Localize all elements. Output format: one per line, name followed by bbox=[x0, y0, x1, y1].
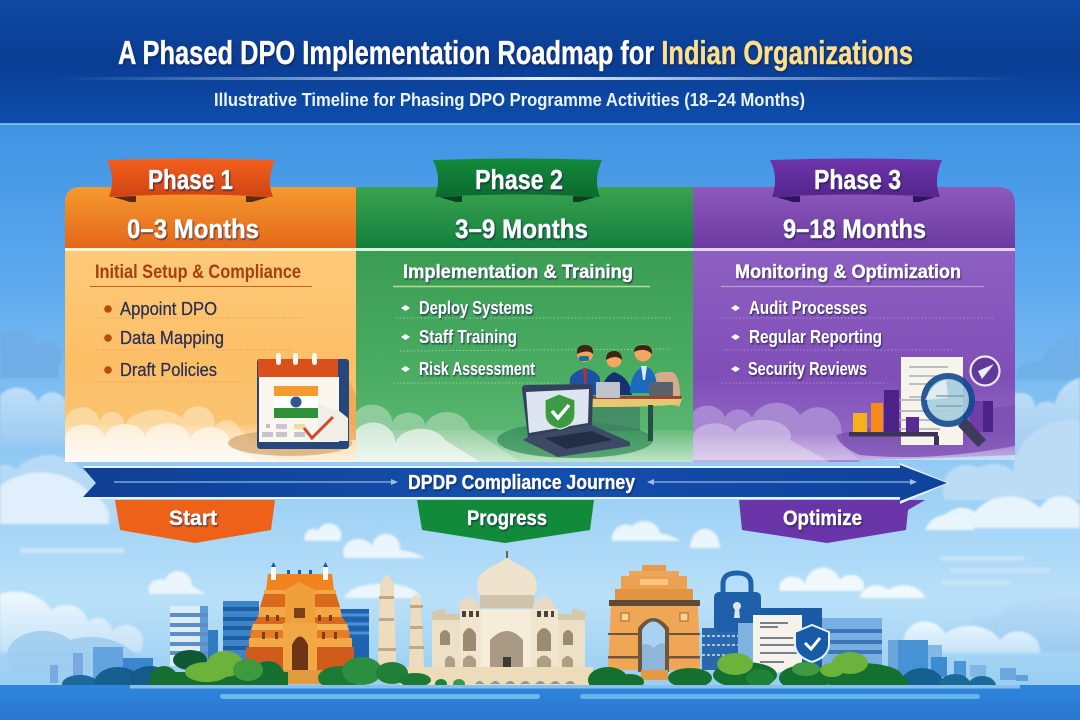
panel: phase 1 bbox=[65, 187, 356, 462]
tag: start: Start bbox=[169, 507, 217, 530]
clouds at base of phase 3 bbox=[693, 403, 1015, 462]
phase 3 duration: 9–18 Months bbox=[783, 214, 926, 244]
phase 1 tasks: Draft Policies bbox=[120, 360, 217, 380]
phase 2 label: Phase 2 bbox=[475, 164, 563, 195]
phase 1 duration: 0–3 Months bbox=[127, 214, 259, 244]
phase 2 tasks: Deploy Systems bbox=[419, 298, 533, 318]
ribbon: phase 2 bbox=[433, 158, 602, 202]
phase 3 tasks: Security Reviews bbox=[748, 359, 867, 379]
laptop bbox=[522, 384, 593, 437]
main building bbox=[432, 620, 585, 667]
skyline: distant city right bbox=[888, 640, 1028, 702]
icon: padlock, document and shield with buildings bbox=[702, 573, 882, 674]
trees right of document bbox=[779, 652, 908, 691]
background clouds right bbox=[779, 334, 1080, 653]
phase 3 tasks: Audit Processes bbox=[749, 298, 867, 318]
arrow label: DPDP Compliance Journey bbox=[408, 472, 636, 494]
small clouds between tags bbox=[149, 514, 975, 598]
phase 3 tasks: Regular Reporting bbox=[749, 327, 882, 347]
icon: calendar with Indian flag bbox=[228, 353, 356, 456]
trees left of temple bbox=[150, 650, 288, 695]
icon: team at desk with secure laptop bbox=[497, 344, 683, 458]
icon: report, bar chart and magnifier bbox=[849, 356, 1000, 447]
water bbox=[0, 685, 1080, 720]
landmark: India Gate bbox=[608, 565, 700, 680]
tag: progress: Progress bbox=[467, 507, 547, 530]
people bbox=[569, 344, 657, 395]
clouds at base of phase 2 bbox=[356, 405, 693, 462]
heading: implementation: Implementation & Training bbox=[403, 261, 633, 283]
clouds at base of phase 1 bbox=[65, 406, 356, 462]
tag: optimize: Optimize bbox=[783, 507, 862, 530]
panel: phase 3 bbox=[693, 187, 1015, 462]
tag: optimize bbox=[739, 500, 925, 543]
phase 2 tasks bbox=[393, 298, 670, 383]
shield bbox=[545, 394, 575, 429]
phase 1 tasks: Appoint DPO bbox=[120, 299, 217, 319]
trees right of temple bbox=[318, 657, 465, 690]
title: A Phased DPO Implementation Roadmap for Indian Organizations bbox=[118, 34, 913, 71]
landmark: Taj Mahal bbox=[378, 551, 593, 685]
side domes bbox=[458, 595, 480, 610]
phase 1 tasks bbox=[96, 299, 302, 382]
platform bbox=[400, 667, 593, 685]
background clouds left bbox=[0, 331, 143, 652]
ribbon: phase 3 bbox=[770, 158, 942, 202]
minarets bbox=[378, 574, 396, 665]
tag: progress bbox=[417, 500, 594, 543]
phase 1 label: Phase 1 bbox=[148, 164, 233, 195]
heading: initial setup: Initial Setup & Compliance bbox=[95, 261, 301, 283]
trees along the shoreline bbox=[150, 650, 908, 695]
phase 3 label: Phase 3 bbox=[814, 164, 901, 195]
phase 3 tasks bbox=[722, 298, 995, 383]
phase 2 tasks: Staff Training bbox=[419, 327, 517, 347]
arrow: DPDP compliance journey bbox=[83, 463, 949, 504]
main dome bbox=[477, 557, 537, 598]
trees around India Gate bbox=[588, 653, 777, 693]
landmark: temple gopuram bbox=[246, 562, 354, 684]
phase 2 duration: 3–9 Months bbox=[455, 214, 588, 244]
phase 2 tasks: Risk Assessment bbox=[419, 359, 535, 379]
phase 1 tasks: Data Mapping bbox=[120, 328, 224, 348]
skyline: office buildings left bbox=[170, 601, 369, 666]
subtitle: Illustrative Timeline for Phasing DPO Programme Activities (18–24 Months) bbox=[214, 89, 805, 110]
tag: start bbox=[115, 500, 275, 543]
desk bbox=[592, 397, 683, 407]
panel: phase 2 bbox=[356, 187, 693, 462]
skyline: distant city left bbox=[7, 631, 174, 706]
ribbon: phase 1 bbox=[107, 158, 275, 202]
heading: monitoring: Monitoring & Optimization bbox=[735, 261, 961, 283]
header banner bbox=[0, 0, 1080, 125]
